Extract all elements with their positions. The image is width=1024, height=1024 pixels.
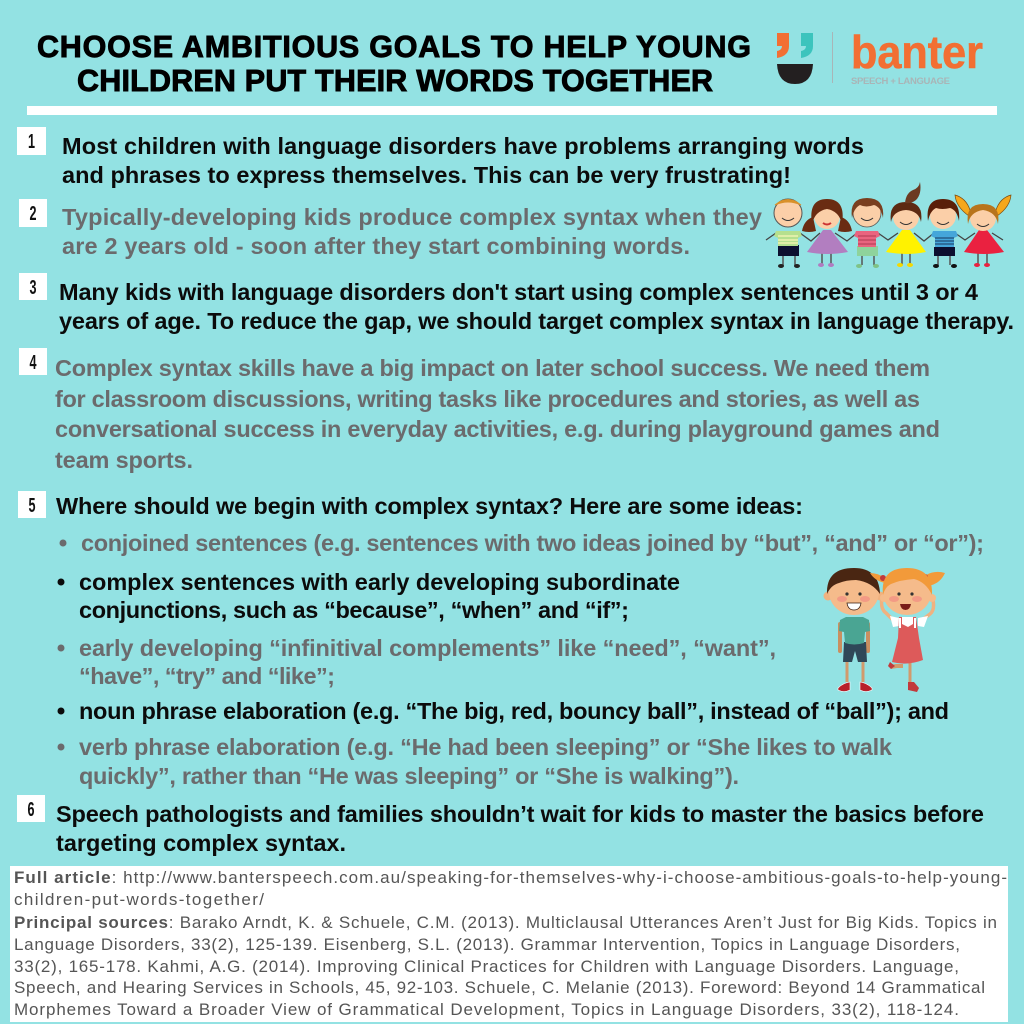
number badge 3: 3 xyxy=(30,277,36,299)
bullet: subordinate conjunctions xyxy=(58,569,680,623)
icon: smile bowl xyxy=(777,64,813,84)
heading 5: Where should we begin with complex syntax? Here are some ideas: xyxy=(56,493,803,519)
item 5 xyxy=(18,491,984,789)
item 1 xyxy=(17,127,864,188)
child 6 xyxy=(955,195,1011,267)
number badge 3 xyxy=(19,273,47,300)
icon: teal quote mark xyxy=(801,33,813,58)
bullet: infinitival complements: early developing “infinitival complements” like “need”, “want”, xyxy=(79,635,776,661)
full article link xyxy=(14,868,1007,909)
bullet: subordinate conjunctions: complex sentences with early developing subordinate xyxy=(79,569,680,595)
full article link: children-put-words-together/ xyxy=(14,890,264,909)
number badge 5 xyxy=(18,491,46,518)
text 6: targeting complex syntax. xyxy=(56,830,346,856)
principal sources: 33(2), 165-178. Kahmi, A.G. (2014). Improving Clinical Practices for Children with Language Disorders. Language, xyxy=(14,957,959,976)
title: CHOOSE AMBITIOUS GOALS TO HELP YOUNG xyxy=(37,30,751,64)
item 6 xyxy=(17,795,984,856)
bullet list xyxy=(58,530,984,789)
child 1 xyxy=(774,199,802,268)
boy xyxy=(824,568,884,692)
joined arms xyxy=(766,233,1003,241)
item 4 xyxy=(19,348,940,473)
number badge 1: 1 xyxy=(28,131,35,153)
text 2: Typically-developing kids produce complex syntax when they xyxy=(62,204,762,230)
text 2: are 2 years old - soon after they start combining words. xyxy=(62,233,690,259)
child 2 xyxy=(802,199,852,267)
child 4 xyxy=(886,182,926,267)
text 4: Complex syntax skills have a big impact on later school success. We need them xyxy=(55,355,930,381)
text 6: Speech pathologists and families shouldn’t wait for kids to master the basics before xyxy=(56,801,984,827)
text 1: and phrases to express themselves. This can be very frustrating! xyxy=(62,162,791,188)
title: CHILDREN PUT THEIR WORDS TOGETHER xyxy=(77,64,713,98)
number badge 5: 5 xyxy=(28,495,36,517)
principal sources xyxy=(14,913,997,1019)
principal sources: Morphemes Toward a Broader View of Grammatical Development, Topics in Language Disorders, 33(2), 118-124. xyxy=(14,1000,959,1019)
number badge 4: 4 xyxy=(30,352,37,374)
bullet: verb phrase elaboration: quickly”, rather than “He was sleeping” or “She is walking”). xyxy=(79,763,739,789)
icon: orange quote mark xyxy=(777,33,789,58)
text 3: Many kids with language disorders don't start using complex sentences until 3 or 4 xyxy=(59,279,978,305)
text 4: for classroom discussions, writing tasks like procedures and stories, as well as xyxy=(55,386,920,412)
logo wordmark: banter xyxy=(851,26,983,78)
principal sources: Speech, and Hearing Services in Schools, 45, 92-103. Schuele, C. Melanie (2013). Foreword: Beyond 14 Grammatical xyxy=(14,978,985,997)
text 2 xyxy=(62,204,762,259)
text 1 xyxy=(62,133,864,188)
child 3 xyxy=(852,198,883,268)
item 2 xyxy=(19,199,762,259)
girl xyxy=(870,568,945,692)
panel: references xyxy=(10,866,1008,1022)
bullet: verb phrase elaboration xyxy=(58,734,893,789)
bullet: infinitival complements xyxy=(58,635,776,689)
bullet: conjoined sentences: conjoined sentences (e.g. sentences with two ideas joined by “but”, “and” or “or”); xyxy=(81,530,984,556)
number badge 2 xyxy=(19,199,47,227)
number badge 6: 6 xyxy=(28,799,34,821)
text 4: team sports. xyxy=(55,447,193,473)
full article link: Full article: http://www.banterspeech.com.au/speaking-for-themselves-why-i-choose-ambitious-goals-to-help-young- xyxy=(14,868,1007,887)
illustration: six children holding hands xyxy=(766,182,1011,268)
number badge 4 xyxy=(19,348,47,375)
text 4 xyxy=(55,355,940,473)
number badge 2: 2 xyxy=(30,203,36,225)
text 4: conversational success in everyday activities, e.g. during playground games and xyxy=(55,416,940,442)
text 3 xyxy=(59,279,1014,334)
principal sources: Principal sources: Barako Arndt, K. & Schuele, C.M. (2013). Multiclausal Utterances Aren’t Just for Big Kids. Topics in xyxy=(14,913,997,932)
bullet: subordinate conjunctions: conjunctions, such as “because”, “when” and “if”; xyxy=(79,597,629,623)
illustration: boy and girl xyxy=(824,568,945,692)
text 6 xyxy=(56,801,984,856)
number badge 1 xyxy=(17,127,46,155)
principal sources: Language Disorders, 33(2), 125-139. Eisenberg, S.L. (2013). Grammar Intervention, Topics in Language Disorders, xyxy=(14,935,960,954)
logo tagline: SPEECH + LANGUAGE xyxy=(851,76,950,87)
text 3: years of age. To reduce the gap, we should target complex syntax in language therapy. xyxy=(59,308,1014,334)
title underline bar xyxy=(27,106,997,115)
item 3 xyxy=(19,273,1014,334)
number badge 6 xyxy=(17,795,45,822)
logo: banter speech + language xyxy=(777,26,983,87)
child 5 xyxy=(928,199,959,268)
bullet: verb phrase elaboration: verb phrase elaboration (e.g. “He had been sleeping” or “She likes to walk xyxy=(79,734,893,760)
title xyxy=(37,30,751,98)
logo divider xyxy=(832,32,833,83)
bullet: noun phrase elaboration: noun phrase elaboration (e.g. “The big, red, bouncy ball”, instead of “ball”); and xyxy=(79,698,949,724)
text 1: Most children with language disorders have problems arranging words xyxy=(62,133,864,159)
bullet: infinitival complements: “have”, “try” and “like”; xyxy=(79,663,335,689)
